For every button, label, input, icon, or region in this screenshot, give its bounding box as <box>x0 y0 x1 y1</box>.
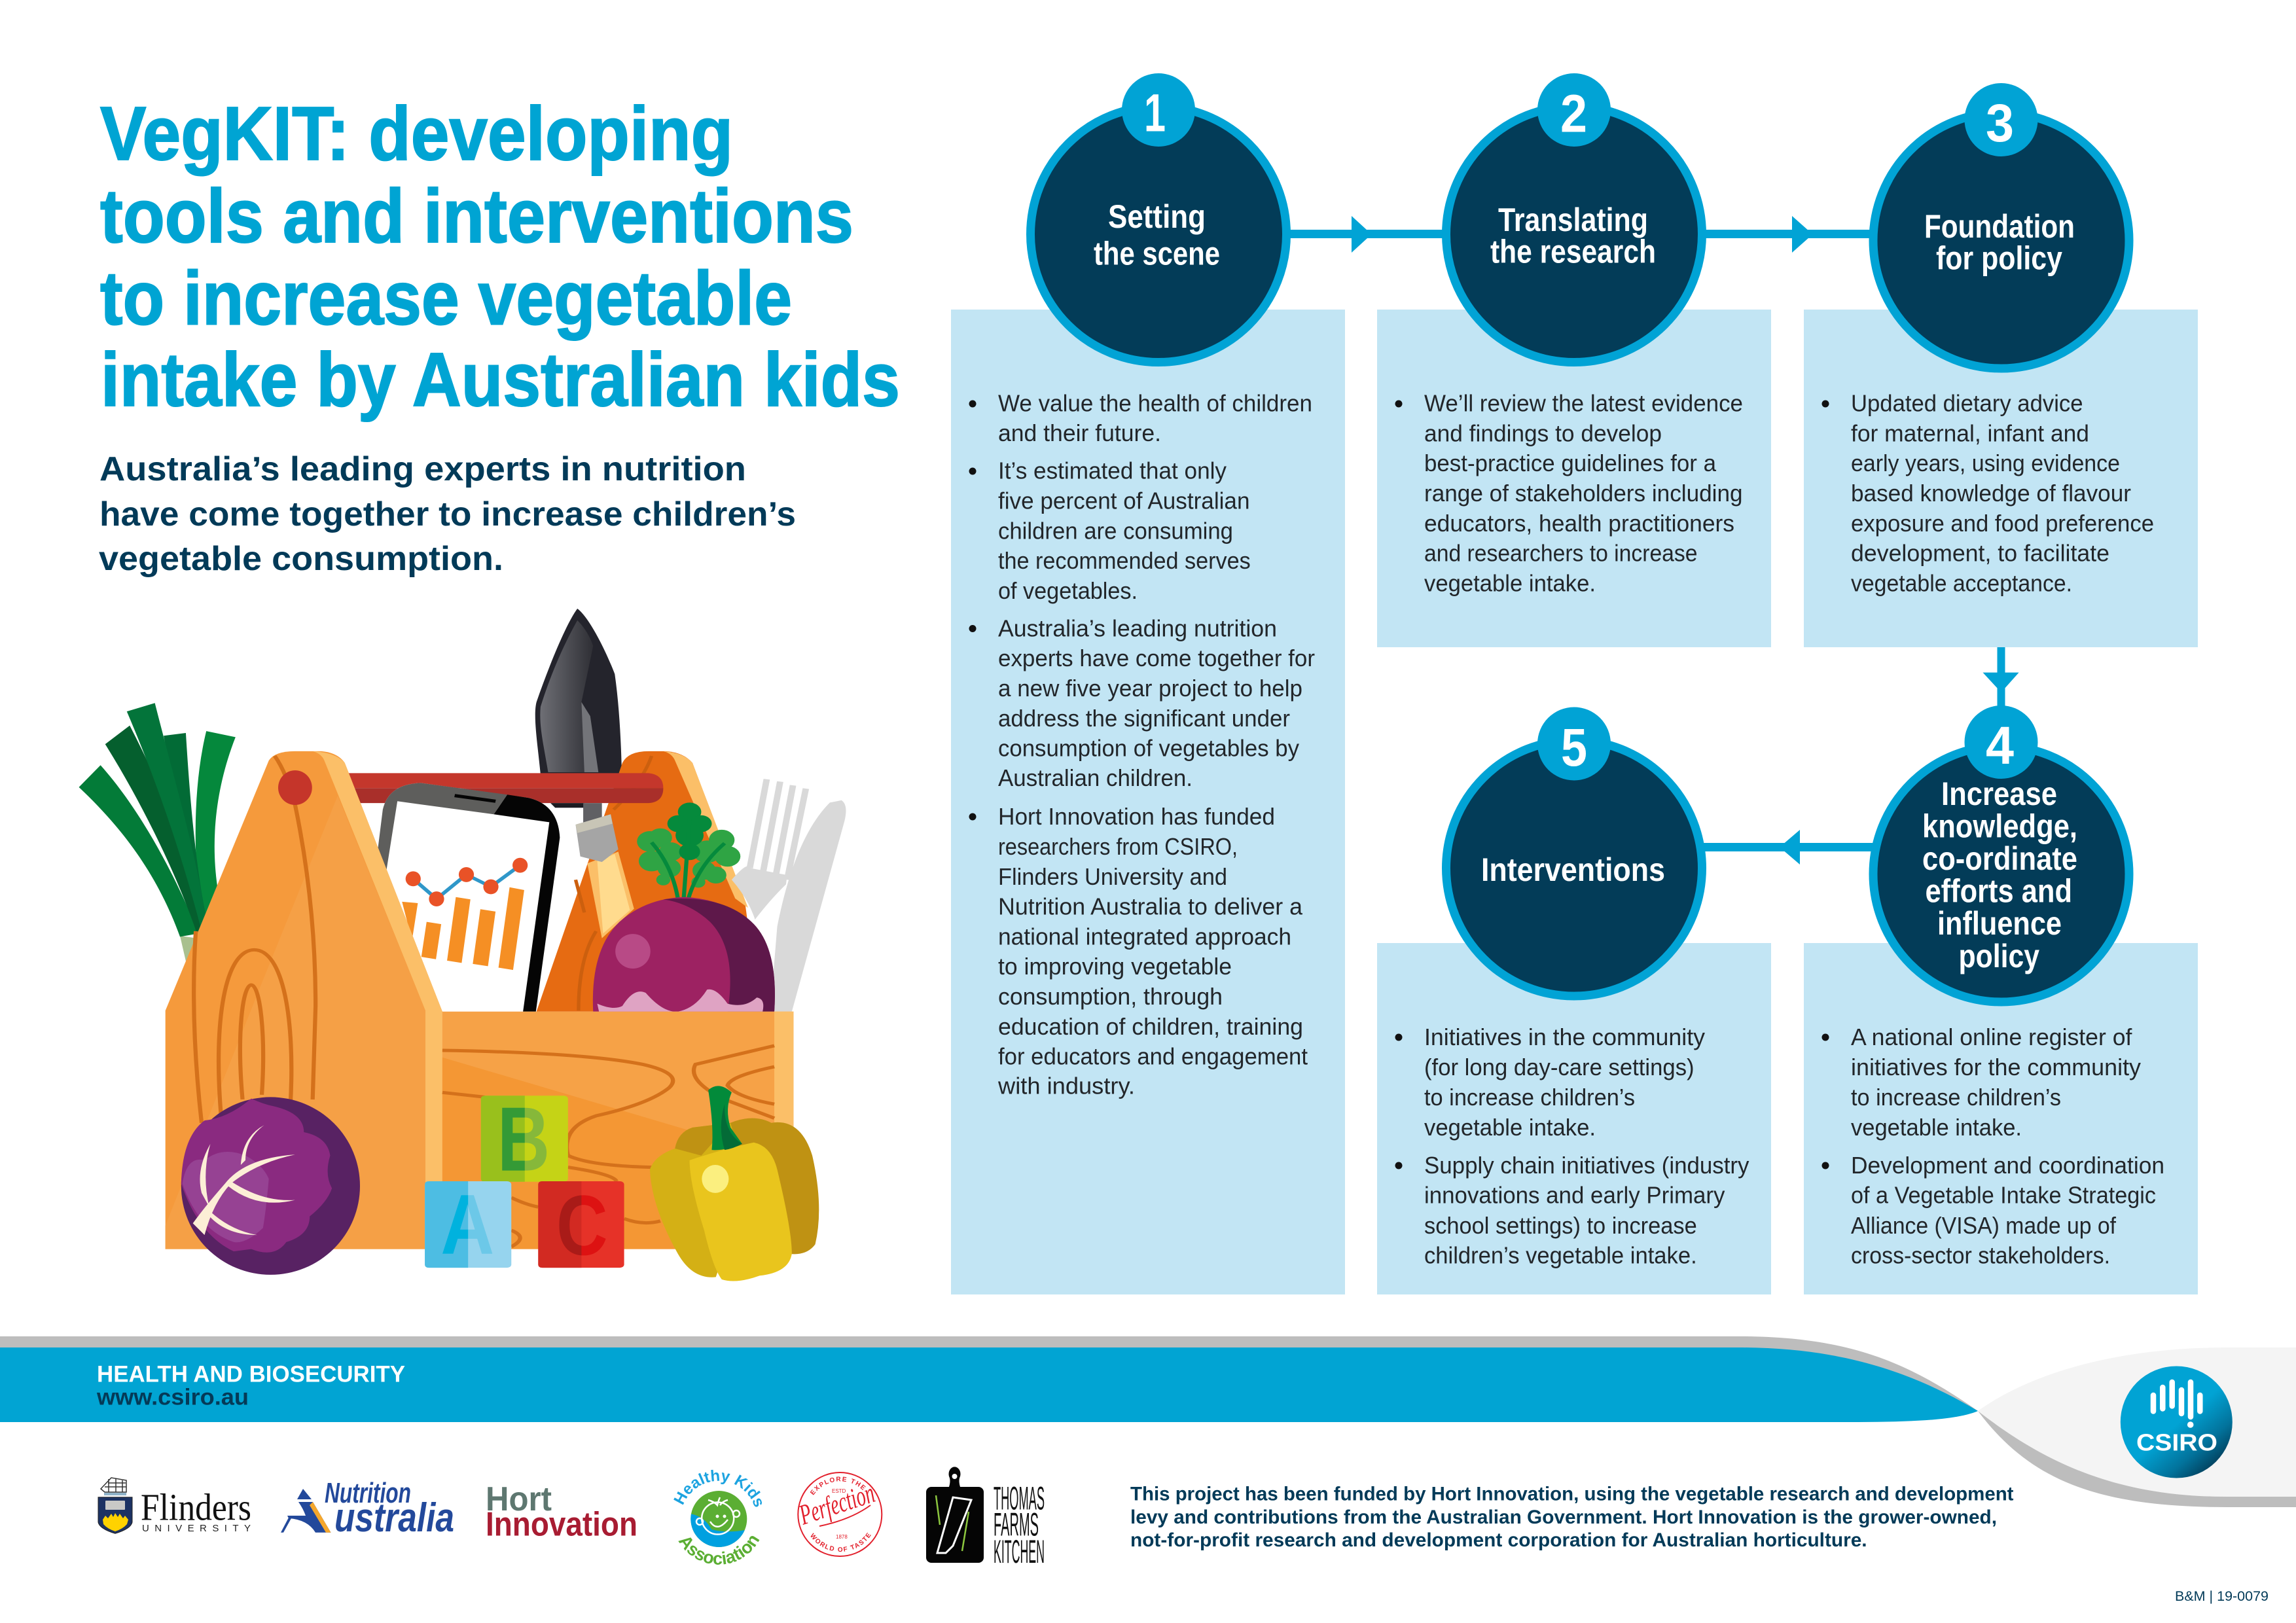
step 1 bullet list <box>969 390 1315 1099</box>
logo: Nutrition Australia: Nutrition <box>325 1477 411 1509</box>
step 1 circle: the scene <box>1094 236 1220 272</box>
panel: step 3 foundation for policy <box>1804 83 2198 647</box>
step 4 circle: knowledge, <box>1922 808 2077 844</box>
logo: Perfection <box>795 1472 882 1557</box>
step 3 circle: 3 <box>1986 94 2014 153</box>
step 4 circle <box>1873 705 2129 1002</box>
step 4 bullet list: Development and coordination <box>1851 1152 2164 1179</box>
yellow capsicum <box>650 1086 819 1281</box>
step 2 bullet list: best-practice guidelines for a <box>1424 450 1717 476</box>
step 2 bullet list: and researchers to increase <box>1424 540 1698 567</box>
step 3 bullet list: vegetable acceptance. <box>1851 569 2072 596</box>
step 4 bullet list: A national online register of <box>1851 1024 2132 1050</box>
front of toolbox <box>442 1012 794 1249</box>
step 5 bullet list: children’s vegetable intake. <box>1424 1242 1697 1269</box>
panel: step 4 increase knowledge <box>1804 705 2198 1294</box>
back gable of toolbox <box>537 751 760 1012</box>
block A: A <box>440 1177 494 1272</box>
parsley leaves <box>637 802 740 899</box>
step 5 circle <box>1446 707 1702 996</box>
footer division text: www.csiro.au <box>96 1385 249 1410</box>
step 2 circle <box>1446 73 1702 363</box>
block B: B <box>497 1088 550 1190</box>
step 1 bullet list: a new five year project to help <box>998 675 1302 702</box>
step 5 circle: Interventions <box>1481 851 1665 888</box>
block B <box>480 1096 568 1182</box>
step 5 bullet list: vegetable intake. <box>1424 1114 1596 1141</box>
logo: Perfection: 1878 <box>836 1534 848 1540</box>
block A: A <box>440 1177 494 1272</box>
title: VegKIT: developing <box>100 91 733 176</box>
step 4 bullet list: cross-sector stakeholders. <box>1851 1242 2110 1269</box>
logo: Flinders University <box>98 1478 251 1534</box>
step 4 bullet list: Alliance (VISA) made up of <box>1851 1212 2117 1239</box>
title: tools and interventions <box>100 173 853 259</box>
step 3 bullet list: for maternal, infant and <box>1851 419 2089 446</box>
step 1 bullet list: children are consuming <box>998 517 1233 544</box>
step 5 bullet list: Initiatives in the community <box>1424 1024 1705 1050</box>
step 3 bullet list: exposure and food preference <box>1851 510 2154 537</box>
subtitle: have come together to increase children’s <box>99 495 796 533</box>
step 4 bullet list: vegetable intake. <box>1851 1114 2022 1141</box>
trowel <box>535 609 622 775</box>
step 5 bullet list: Supply chain initiatives (industry <box>1424 1152 1749 1179</box>
step 1 bullet list: five percent of Australian <box>998 488 1250 514</box>
funding statement <box>1130 1484 2013 1551</box>
subtitle: vegetable consumption. <box>99 540 503 578</box>
logo: Healthy Kids Association: Healthy Kids <box>673 1470 762 1507</box>
step 5 circle: 5 <box>1561 718 1587 777</box>
logo: Nutrition Australia: ustralia <box>334 1495 454 1541</box>
logo: Perfection: ESTD <box>832 1488 846 1494</box>
step 1 bullet list: We value the health of children <box>998 390 1312 417</box>
arrow: step 2 to step 3 <box>1702 216 1878 253</box>
text: THOMAS <box>994 1480 1045 1517</box>
arrow: step 3 to step 4 <box>1983 645 2019 710</box>
logo: Perfection: Perfection <box>795 1476 878 1531</box>
step 4 circle: Increase <box>1941 776 2057 812</box>
step 3 bullet list: Updated dietary advice <box>1851 390 2083 417</box>
panel: step 5 interventions <box>1377 707 1771 1294</box>
block C: C <box>556 1179 608 1273</box>
step 5 bullet list: innovations and early Primary <box>1424 1182 1725 1209</box>
footer division text: HEALTH AND BIOSECURITY <box>97 1362 405 1387</box>
subtitle <box>99 450 796 578</box>
beetroot <box>593 897 775 1012</box>
step 1 bullet list: Australia’s leading nutrition <box>998 615 1277 641</box>
step 1 circle <box>1030 73 1287 363</box>
step 1 bullet list: and their future. <box>998 419 1161 446</box>
step 3 circle: for policy <box>1936 240 2062 277</box>
step 3 circle: Foundation <box>1924 208 2075 245</box>
step 2 circle: the research <box>1490 234 1656 270</box>
arrow: step 4 to step 5 <box>1698 830 1878 865</box>
step 1 bullet list: the recommended serves <box>998 547 1251 574</box>
step 3 circle <box>1873 83 2129 368</box>
text: KITCHEN <box>994 1533 1045 1570</box>
CSIRO logo <box>2121 1366 2233 1478</box>
logo: Hort Innovation: Hort <box>486 1480 552 1518</box>
step 5 bullet list: to increase children’s <box>1424 1084 1635 1111</box>
step 1 bullet list: for educators and engagement <box>998 1043 1308 1070</box>
logo: Perfection: EXPLORE THE <box>810 1476 866 1495</box>
step 3 bullet list: development, to facilitate <box>1851 540 2109 567</box>
step 1 bullet list: with industry. <box>997 1072 1135 1099</box>
funding statement: levy and contributions from the Australian Government. Hort Innovation is the grower-owned, <box>1130 1507 1997 1528</box>
CSIRO logo: CSIRO <box>2136 1429 2217 1456</box>
red cabbage <box>181 1097 360 1275</box>
step 2 bullet list: range of stakeholders including <box>1424 480 1743 507</box>
fork and knife <box>732 779 846 1012</box>
step 5 bullet list <box>1395 1024 1749 1269</box>
step 1 bullet list: of vegetables. <box>998 577 1138 604</box>
step 2 bullet list: vegetable intake. <box>1424 569 1596 596</box>
step 4 bullet list: of a Vegetable Intake Strategic <box>1851 1182 2156 1209</box>
step 4 circle: 4 <box>1986 716 2014 776</box>
logo: Hort Innovation <box>486 1480 637 1544</box>
logo: Nutrition Australia <box>281 1477 454 1541</box>
step 2 circle: 2 <box>1560 84 1587 144</box>
footer ribbon <box>0 1336 2296 1507</box>
step 1 bullet list: national integrated approach <box>998 923 1291 950</box>
step 1 bullet list: consumption, through <box>998 983 1223 1010</box>
step 2 bullet list <box>1395 390 1743 596</box>
step 1 bullet list: It’s estimated that only <box>998 457 1227 484</box>
step 1 bullet list: Australian children. <box>998 764 1193 791</box>
step 1 circle: Setting <box>1108 198 1206 235</box>
footer division text <box>96 1362 405 1410</box>
subtitle: Australia’s leading experts in nutrition <box>99 450 746 488</box>
funding statement: not-for-profit research and development corporation for Australian horticulture. <box>1130 1529 1867 1551</box>
logo: Healthy Kids Association: Association <box>678 1536 759 1565</box>
step 3 bullet list: early years, using evidence <box>1851 450 2120 476</box>
ship crest <box>101 1478 126 1495</box>
step 5 bullet list: (for long day-care settings) <box>1424 1054 1695 1080</box>
step 5 bullet list: school settings) to increase <box>1424 1212 1697 1239</box>
illustration: toolbox of vegetables <box>79 609 846 1281</box>
step 4 bullet list: to increase children’s <box>1851 1084 2061 1111</box>
funding statement: This project has been funded by Hort Innovation, using the vegetable research and development <box>1130 1484 2013 1505</box>
step 1 bullet list: Nutrition Australia to deliver a <box>998 893 1303 920</box>
step 4 bullet list <box>1822 1024 2164 1269</box>
logo: Flinders University: Flinders <box>141 1486 251 1529</box>
red handle <box>345 773 663 803</box>
step 1 bullet list: education of children, training <box>998 1013 1303 1040</box>
step 2 bullet list: We’ll review the latest evidence <box>1424 390 1743 417</box>
panel: step 1 setting the scene <box>951 73 1345 1294</box>
step 1 circle: 1 <box>1144 84 1166 143</box>
step 4 circle: policy <box>1958 938 2039 974</box>
document reference number: B&M | 19-0079 <box>2175 1589 2269 1604</box>
logo: Thomas Farms Kitchen <box>926 1467 1045 1570</box>
step 4 circle: efforts and <box>1926 873 2072 910</box>
step 4 circle: influence <box>1937 905 2062 942</box>
step 2 circle: Translating <box>1498 202 1648 238</box>
title: intake by Australian kids <box>101 337 900 422</box>
logo: Flinders University: UNIVERSITY <box>142 1523 251 1534</box>
step 3 bullet list <box>1822 390 2154 596</box>
step 1 bullet list: experts have come together for <box>998 645 1315 671</box>
step 1 bullet list: researchers from CSIRO, <box>998 833 1238 860</box>
title <box>100 91 900 422</box>
step 2 bullet list: educators, health practitioners <box>1424 510 1734 537</box>
step 1 bullet list: to improving vegetable <box>998 953 1232 980</box>
phone with chart <box>377 783 560 1012</box>
left gable of toolbox <box>166 751 442 1249</box>
block B: B <box>497 1088 550 1190</box>
step 4 circle: co-ordinate <box>1922 840 2077 877</box>
step 3 bullet list: based knowledge of flavour <box>1851 480 2131 507</box>
step 1 bullet list: Flinders University and <box>998 863 1227 890</box>
trowel shaft <box>550 803 619 862</box>
step 1 bullet list: address the significant under <box>998 705 1290 732</box>
text: FARMS <box>994 1507 1039 1543</box>
logo: Hort Innovation: Innovation <box>486 1506 637 1544</box>
logo: Healthy Kids Association <box>673 1470 762 1565</box>
title: to increase vegetable <box>100 255 792 340</box>
step 1 bullet list: consumption of vegetables by <box>998 734 1299 762</box>
logo: Perfection: WORLD OF TASTE <box>810 1533 871 1552</box>
arrow: step 1 to step 2 <box>1283 216 1453 253</box>
step 1 bullet list: Hort Innovation has funded <box>998 803 1275 830</box>
step 2 bullet list: and findings to develop <box>1424 419 1662 446</box>
panel: step 2 translating the research <box>1377 73 1771 647</box>
leek <box>79 703 236 966</box>
block C: C <box>556 1179 608 1273</box>
step 4 bullet list: initiatives for the community <box>1851 1054 2141 1080</box>
